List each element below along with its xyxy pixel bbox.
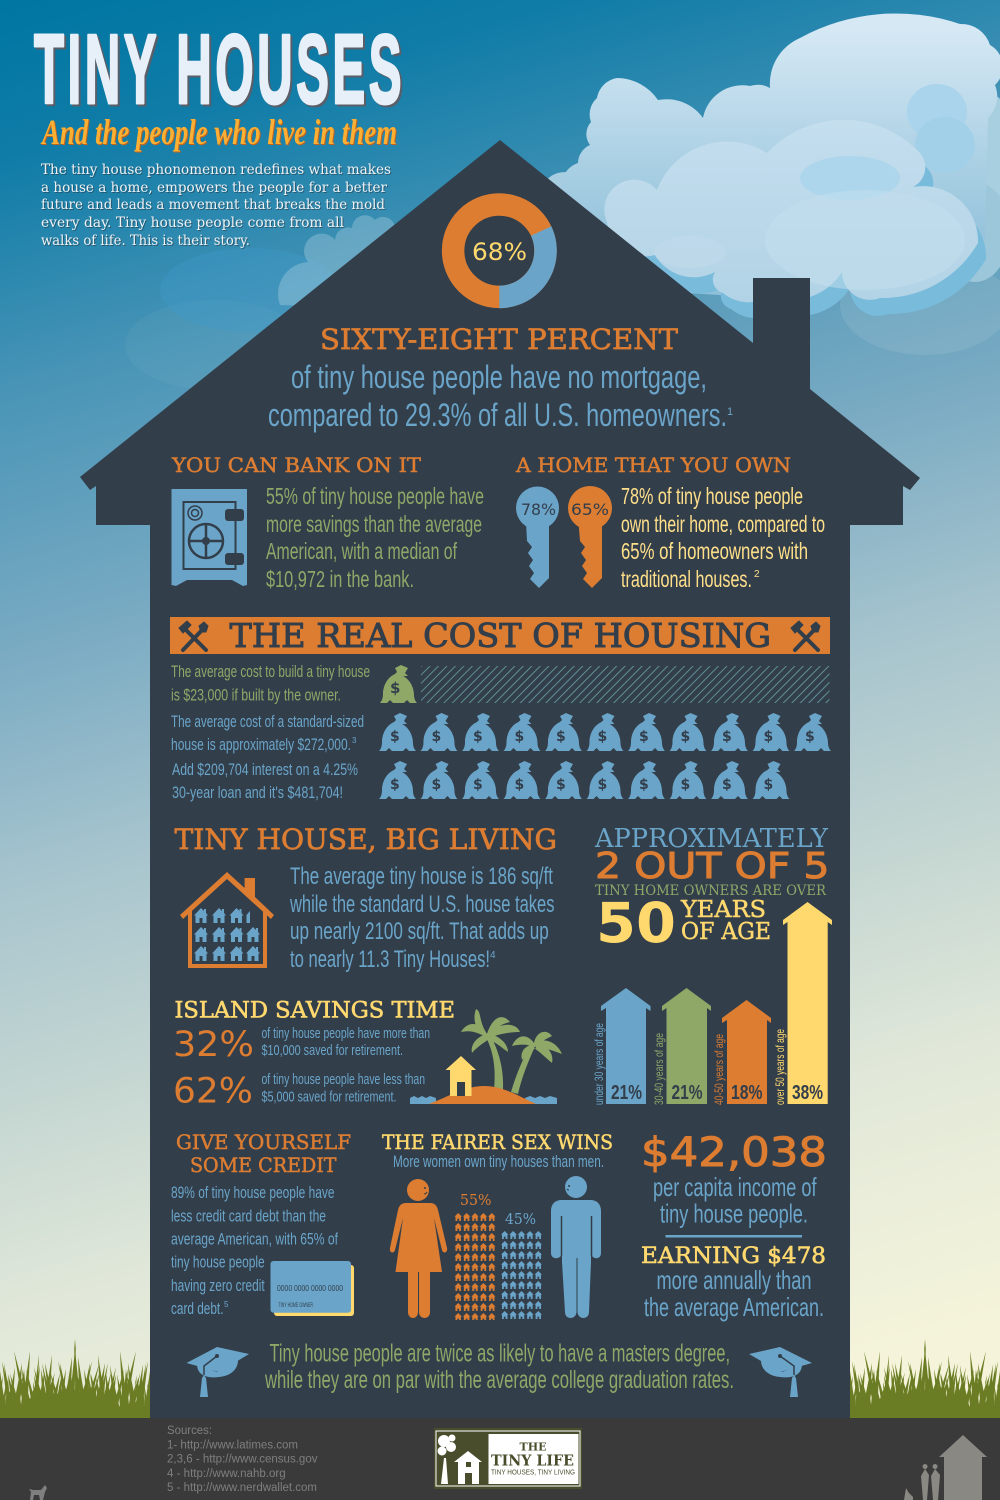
arrow: 30-40: 21% [672, 1082, 703, 1104]
age stat: APPROXIMATELY [594, 824, 829, 854]
intro text: The tiny house phonomenon redefines what makes [41, 162, 391, 178]
green money bag and hatched bar: $ [390, 679, 400, 697]
savings text: $10,972 in the bank. [266, 566, 414, 592]
subtitle: And the people who live in them [41, 112, 397, 152]
icon: safe [172, 489, 247, 586]
stat: 62%: 62% [173, 1072, 253, 1112]
sources: 5 - http://www.nerdwallet.com [167, 1482, 317, 1494]
square footage text: The average tiny house is 186 sq/ft [290, 863, 553, 890]
degree statement: while they are on par with the average college graduation rates. [264, 1366, 734, 1394]
stat: income: more annually than [656, 1265, 812, 1295]
faint clouds left of house [125, 215, 430, 390]
stat: income: tiny house people. [660, 1198, 808, 1228]
age stat: YEARS [680, 897, 766, 923]
money bags row 1: $ [598, 729, 607, 745]
icon: key 65% [568, 486, 612, 588]
donut chart 68% [453, 204, 557, 308]
ownership text: 65% of homeowners with [621, 538, 808, 564]
sources: 4 - http://www.nahb.org [167, 1468, 286, 1480]
logo: the tiny life: TINY LIFE [491, 1452, 574, 1470]
credit text: having zero credit [171, 1276, 265, 1295]
money bags row 2: $ [556, 777, 566, 793]
square footage text: to nearly 11.3 Tiny Houses! [290, 946, 490, 973]
ownership text: 2 [754, 569, 760, 580]
intro text: every day. Tiny house people come from all [41, 215, 345, 231]
heading: give yourself some credit: GIVE YOURSELF [176, 1130, 351, 1154]
sources: Sources: [167, 1425, 212, 1437]
icon: graduation cap left [186, 1347, 249, 1397]
big cloud behind the house [543, 13, 1000, 355]
age stat: OF AGE [681, 919, 771, 945]
arrow: under 30 [592, 988, 650, 1105]
logo: the tiny life: TINY HOUSES, TINY LIVING [491, 1470, 575, 1476]
credit text [171, 1183, 338, 1318]
chart: 55 vs 45 percent houses: 55% [460, 1191, 492, 1209]
heading: bank: YOU CAN BANK ON IT [171, 453, 422, 477]
house silhouette [80, 140, 920, 1418]
heading: island savings time: ISLAND SAVINGS TIME [174, 998, 455, 1024]
credit text: 5 [224, 1300, 229, 1309]
credit text: 89% of tiny house people have [171, 1183, 334, 1202]
ownership text: 78% of tiny house people [621, 483, 803, 509]
arrow: 40-50: 18% [731, 1082, 763, 1104]
age stat: TINY HOME OWNERS ARE OVER [595, 883, 826, 899]
money bags row 1: $ [639, 729, 649, 745]
icon: tiny house and people silhouette [904, 1435, 987, 1500]
mortgage statement: compared to 29.3% of all U.S. homeowners. [268, 397, 727, 433]
donut chart 68%: 68% [472, 238, 527, 266]
stat: income: per capita income of [653, 1172, 817, 1202]
square footage text [289, 863, 554, 973]
ownership text: own their home, compared to [621, 511, 825, 537]
icon: crossed tools right [791, 621, 820, 650]
heading: tiny house big living: TINY HOUSE, BIG LIVING [174, 823, 557, 856]
square footage text: while the standard U.S. house takes [289, 891, 554, 918]
stat: income: $42,038 [641, 1130, 827, 1176]
heading: the fairer sex wins: THE FAIRER SEX WINS [382, 1130, 613, 1154]
arrow: over 50: over 50 years of age [773, 1029, 787, 1105]
heading: home: A HOME THAT YOU OWN [515, 453, 791, 477]
money bags row 1: $ [390, 729, 400, 745]
intro text: walks of life. This is their story. [41, 233, 250, 249]
retirement text [262, 1025, 430, 1106]
intro text: future and leads a movement that breaks the mold [41, 197, 385, 213]
icon: key 65%: 65% [571, 500, 609, 519]
title: TINY HOUSES [34, 14, 405, 124]
cost text: The average cost of a standard-sized [171, 712, 364, 731]
logo: the tiny life: THE [520, 1440, 546, 1454]
chart: 55 vs 45 percent houses [454, 1191, 543, 1320]
money bags row 2: $ [473, 777, 483, 793]
arrow: 30-40 [652, 988, 711, 1105]
savings text: more savings than the average [266, 511, 482, 537]
square footage text: 4 [490, 950, 496, 961]
degree statement [264, 1340, 734, 1394]
mortgage statement: 1 [727, 406, 733, 418]
icon: dog silhouette [29, 1485, 47, 1500]
arrow: 30-40: 30-40 years of age [652, 1033, 666, 1105]
heading: give yourself some credit: SOME CREDIT [190, 1153, 337, 1177]
age stat [594, 824, 830, 955]
grass right [850, 1340, 1000, 1418]
money bags row 1: $ [764, 729, 773, 745]
cost text: 3 [352, 736, 357, 745]
money bags row 1: $ [680, 729, 690, 745]
money bags row 2: $ [639, 777, 649, 793]
money bags row 2 [379, 761, 790, 799]
icon: credit card: 0000 0000 0000 0000 [277, 1284, 343, 1293]
money bags row 2: $ [514, 777, 524, 793]
savings text [266, 483, 484, 592]
footer band [0, 1418, 1000, 1500]
icon: key 78% [516, 486, 559, 588]
icon: key 78%: 78% [521, 500, 556, 519]
stat: 32%: 32% [173, 1025, 254, 1065]
square footage text: up nearly 2100 sq/ft. That adds up [290, 918, 549, 945]
arrow: under 30: under 30 years of age [592, 1023, 606, 1105]
sources [167, 1425, 318, 1494]
stat: income: the average American. [644, 1292, 824, 1322]
icon: crossed tools left [179, 621, 208, 650]
heading: sixty-eight percent: SIXTY-EIGHT PERCENT [320, 323, 678, 356]
degree statement: Tiny house people are twice as likely to have a masters degree, [270, 1340, 730, 1368]
icon: woman [390, 1179, 447, 1318]
mortgage statement: of tiny house people have no mortgage, [291, 359, 707, 395]
money bags row 2: $ [390, 777, 400, 793]
arrow: over 50: 38% [792, 1082, 823, 1104]
money bags row 2: $ [432, 777, 441, 793]
retirement text: $5,000 saved for retirement. [262, 1088, 396, 1106]
chart: 55 vs 45 percent houses: 45% [505, 1210, 536, 1228]
arrow: over 50 [773, 902, 832, 1105]
cost text: house is approximately $272,000. [171, 735, 351, 754]
cost text: is $23,000 if built by the owner. [171, 686, 341, 704]
ownership text: traditional houses. [621, 566, 752, 592]
money bags row 1: $ [514, 729, 524, 745]
sources: 2,3,6 - http://www.census.gov [167, 1454, 318, 1466]
cost text: Add $209,704 interest on a 4.25% [172, 760, 358, 779]
age stat: 50 [596, 891, 676, 955]
fairer sex subtext: More women own tiny houses than men. [393, 1152, 604, 1171]
money bags row 2: $ [680, 777, 690, 793]
money bags row 2: $ [722, 777, 732, 793]
age stat: 2 OUT OF 5 [595, 846, 830, 887]
arrow: 40-50: 40-50 years of age [712, 1034, 726, 1105]
icon: house full of houses [180, 872, 274, 966]
stat: income [641, 1130, 827, 1322]
credit text: card debt. [171, 1299, 224, 1318]
money bags row 2: $ [598, 777, 607, 793]
icon: graduation cap right [749, 1347, 812, 1397]
savings text: American, with a median of [266, 538, 457, 564]
money bags row 1 [379, 713, 831, 751]
ownership text [621, 483, 825, 592]
sources: 1- http://www.latimes.com [167, 1440, 298, 1452]
money bags row 1: $ [722, 729, 732, 745]
chart: age arrows [592, 902, 832, 1105]
money bags row 1: $ [805, 729, 815, 745]
cost text: The average cost to build a tiny house [171, 662, 370, 681]
intro text [41, 162, 391, 249]
money bags row 2: $ [764, 777, 773, 793]
savings text: 55% of tiny house people have [266, 483, 484, 509]
icon: island with palm trees [410, 1009, 562, 1104]
money bags row 1: $ [432, 729, 441, 745]
stat: income: EARNING $478 [641, 1244, 826, 1269]
intro text: a house a home, empowers the people for a better [41, 180, 387, 196]
cost text [171, 662, 370, 802]
banner: the real cost of housing: THE REAL COST OF HOUSING [230, 616, 771, 655]
icon: credit card [270, 1261, 354, 1316]
heading: give yourself some credit [176, 1130, 351, 1177]
retirement text: of tiny house people have less than [262, 1071, 425, 1088]
icon: credit card: TINY HOME OWNER [278, 1303, 313, 1309]
money bags row 1: $ [556, 729, 566, 745]
icon: man [551, 1176, 601, 1318]
cost text: 30-year loan and it's $481,704! [172, 783, 343, 802]
arrow: under 30: 21% [611, 1082, 642, 1104]
grass left [0, 1340, 150, 1418]
credit text: less credit card debt than the [171, 1206, 326, 1226]
credit text: tiny house people [171, 1252, 265, 1272]
green money bag and hatched bar [380, 665, 830, 703]
logo: the tiny life [434, 1428, 582, 1489]
arrow: 40-50 [712, 1000, 771, 1105]
money bags row 1: $ [473, 729, 483, 745]
credit text: average American, with 65% of [171, 1230, 338, 1248]
mortgage statement [268, 359, 733, 433]
retirement text: $10,000 saved for retirement. [262, 1042, 403, 1059]
retirement text: of tiny house people have more than [262, 1025, 430, 1042]
